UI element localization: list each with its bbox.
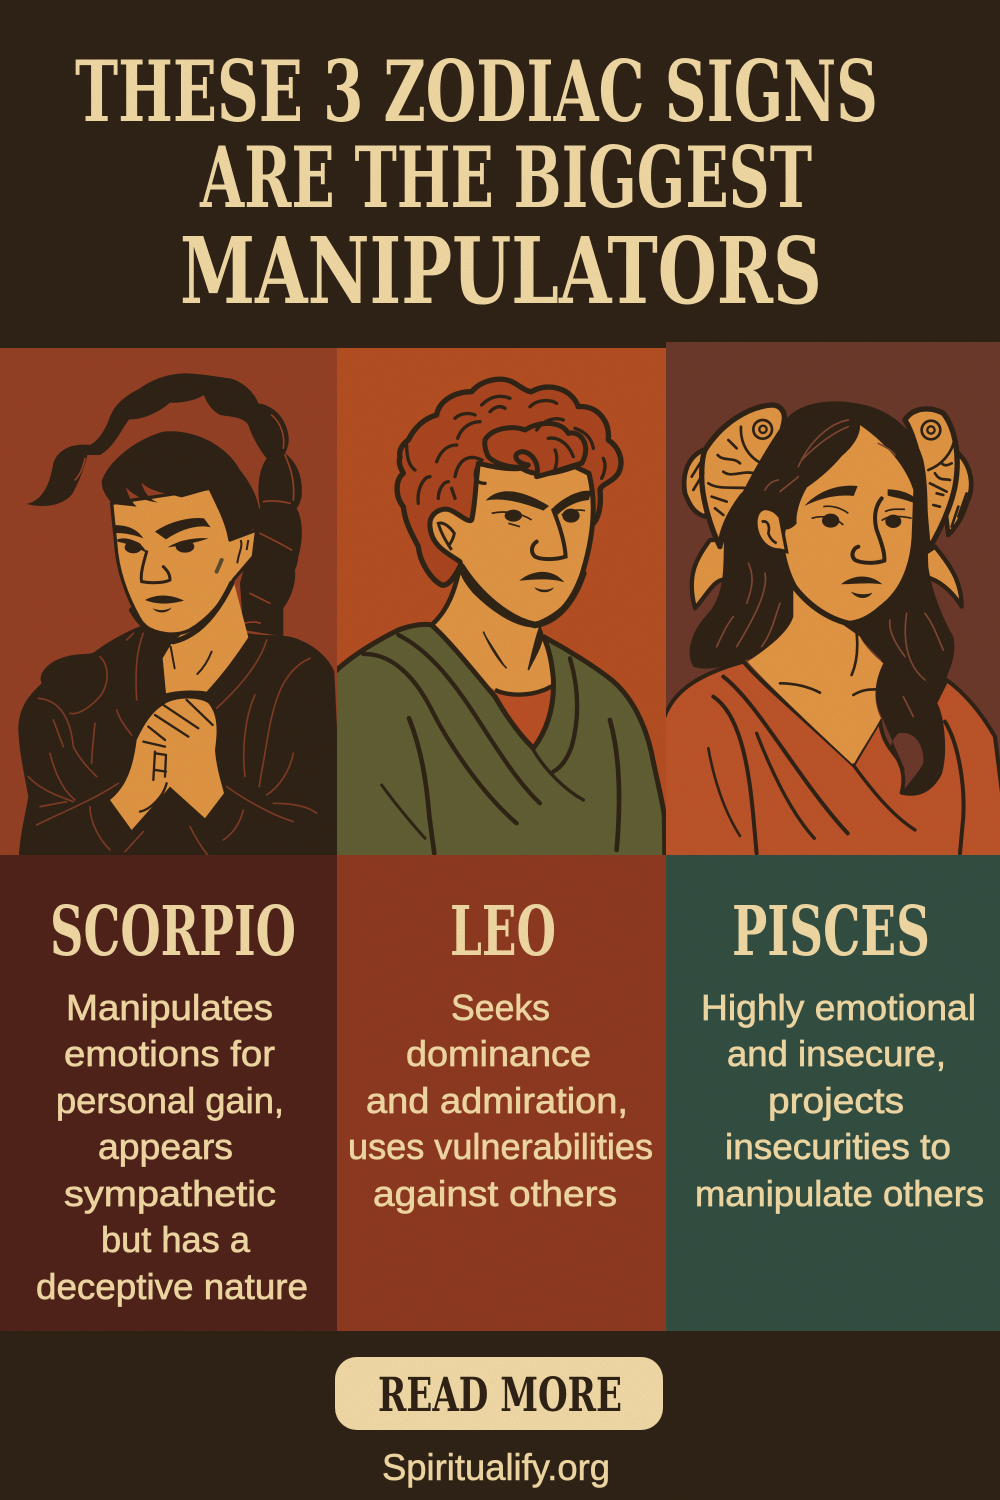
illustration: robe fold lines: [363, 635, 619, 853]
heading: Scorpio: SCORPIO: [50, 892, 296, 972]
illustration: clasped hands: [110, 698, 224, 830]
illustration: neck lines: [483, 627, 542, 670]
button: read more: READ MORE: [378, 1368, 622, 1423]
text block: Scorpio traits: [36, 987, 308, 1307]
panel: Pisces description: [666, 855, 1000, 1331]
heading: Pisces: PISCES: [732, 892, 930, 972]
illustration: face: [112, 488, 257, 634]
illustration: hair curl lines: [407, 396, 605, 503]
illustration: hair over forehead: [786, 425, 860, 530]
panel: Scorpio description: [0, 855, 337, 1331]
illustration: facial features: [804, 486, 913, 598]
title: [75, 42, 878, 325]
illustration: front curl: [485, 423, 586, 477]
illustration: robe: [18, 625, 343, 863]
text block: Leo traits: against others: [373, 1173, 617, 1214]
illustration: neck: [435, 574, 551, 692]
text block: website: Spiritualify.org: [382, 1447, 610, 1488]
panel: Leo portrait: [328, 348, 666, 870]
title: MANIPULATORS: [180, 217, 822, 325]
icon: right fish: [905, 409, 971, 607]
text block: Leo traits: uses vulnerabilities: [348, 1126, 653, 1167]
text block: Leo traits: [348, 987, 653, 1214]
illustration: green robe: [328, 624, 665, 870]
illustration: drapery lines: [708, 677, 964, 853]
text block: Scorpio traits: sympathetic: [64, 1173, 276, 1214]
illustration: face: [785, 425, 913, 621]
text block: Pisces traits: projects: [768, 1080, 904, 1121]
icon: scorpion tail braid: [27, 373, 302, 637]
illustration: tunic undershirt: [495, 687, 552, 748]
text block: Scorpio traits: personal gain,: [56, 1080, 284, 1121]
heading: Leo: LEO: [450, 892, 556, 972]
text block: Pisces traits: Highly emotional: [701, 987, 976, 1028]
text block: Pisces traits: manipulate others: [695, 1173, 984, 1214]
illustration: robe: [663, 662, 1000, 870]
illustration: facial features: [113, 518, 211, 612]
text block: Leo traits: Seeks: [451, 987, 550, 1028]
illustration: neck lines: [780, 633, 877, 695]
illustration: neck and chest: [748, 590, 883, 765]
text block: Scorpio traits: deceptive nature: [36, 1266, 308, 1307]
text block: Scorpio traits: emotions for: [64, 1033, 275, 1074]
text block: Scorpio traits: but has a: [101, 1219, 251, 1260]
panel: Pisces portrait: [663, 342, 1000, 870]
illustration: collar line: [495, 686, 552, 695]
panel: Scorpio portrait: [0, 348, 343, 863]
panel: footer background: [0, 1331, 1000, 1500]
text block: Leo traits: dominance: [406, 1033, 591, 1074]
illustration: robe fold lines: [28, 633, 317, 858]
illustration: curly hair: [397, 379, 621, 585]
text block: Leo traits: and admiration,: [366, 1080, 628, 1121]
illustration: face: [430, 463, 593, 625]
text block: Pisces traits: and insecure,: [727, 1033, 946, 1074]
title: ARE THE BIGGEST: [199, 128, 812, 227]
text block: Scorpio traits: Manipulates: [66, 987, 273, 1028]
illustration: long hair: [690, 401, 954, 794]
panel: header background: [0, 0, 1000, 350]
illustration: hair: [102, 431, 260, 541]
illustration: facial features: [486, 491, 591, 592]
text block: Pisces traits: insecurities to: [725, 1126, 951, 1167]
illustration: neck: [163, 580, 248, 693]
panel: Leo description: [337, 855, 666, 1331]
text block: Scorpio traits: appears: [98, 1126, 233, 1167]
illustration: ear: [756, 509, 787, 552]
icon: left fish: [684, 405, 784, 608]
button: read more: [335, 1357, 663, 1430]
text block: Pisces traits: [695, 987, 984, 1214]
